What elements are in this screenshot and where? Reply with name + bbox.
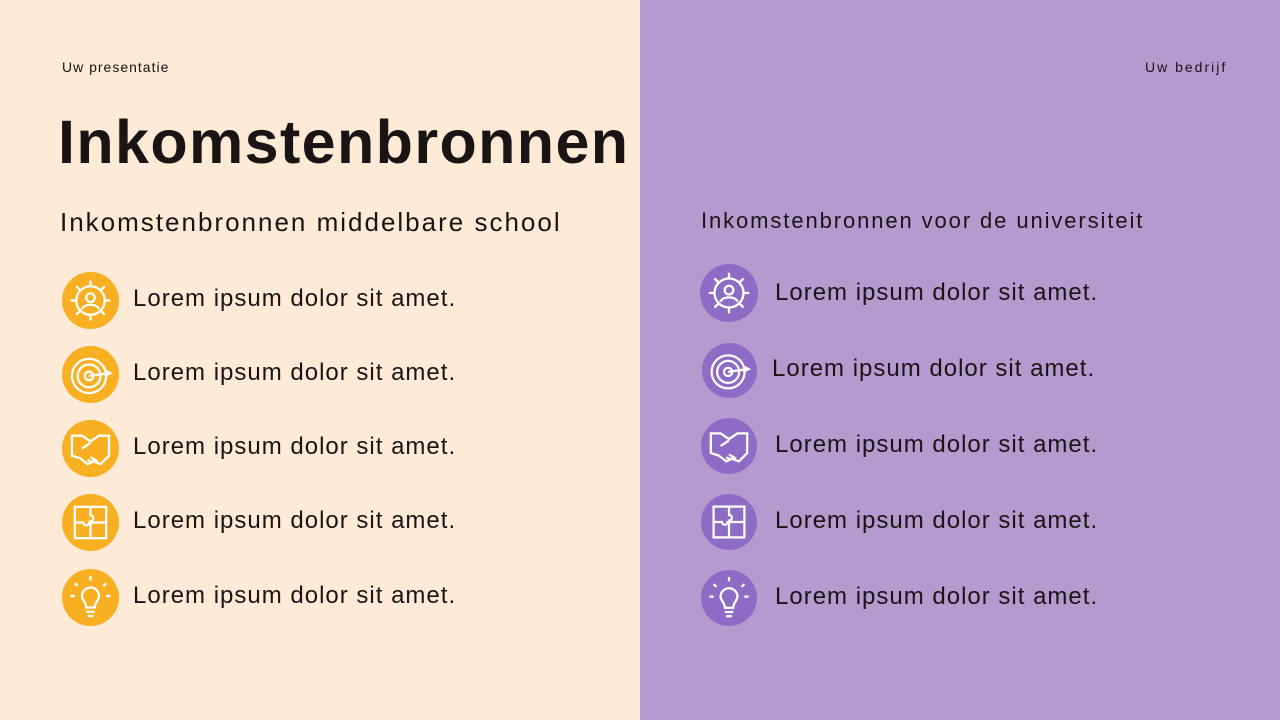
list: left	[62, 272, 456, 626]
icon: target	[702, 343, 757, 398]
title: Inkomstenbronnen	[58, 108, 629, 176]
text: Lorem ipsum dolor sit amet.	[772, 355, 1095, 382]
icon: target	[62, 346, 119, 403]
heading: right: Inkomstenbronnen voor de universiteit	[701, 208, 1144, 233]
icon: bulb	[701, 570, 757, 626]
header right: Uw bedrijf	[1145, 59, 1227, 75]
text: Lorem ipsum dolor sit amet.	[133, 582, 456, 609]
header left: Uw presentatie	[62, 59, 169, 75]
panel: left background	[0, 0, 640, 720]
text: Lorem ipsum dolor sit amet.	[133, 285, 456, 312]
icon: handshake	[62, 420, 119, 477]
icon: puzzle	[701, 494, 757, 550]
text: Lorem ipsum dolor sit amet.	[133, 433, 456, 460]
icon: bulb	[62, 569, 119, 626]
icon: gear	[62, 272, 119, 329]
text: Lorem ipsum dolor sit amet.	[775, 279, 1098, 306]
text: Lorem ipsum dolor sit amet.	[775, 431, 1098, 458]
text: Lorem ipsum dolor sit amet.	[133, 507, 456, 534]
icon: handshake	[701, 418, 757, 474]
text: Lorem ipsum dolor sit amet.	[775, 507, 1098, 534]
heading: left: Inkomstenbronnen middelbare school	[60, 207, 562, 237]
list: right	[700, 264, 1098, 626]
icon: gear	[700, 264, 758, 322]
text: Lorem ipsum dolor sit amet.	[133, 359, 456, 386]
text: Lorem ipsum dolor sit amet.	[775, 583, 1098, 610]
icon: puzzle	[62, 494, 119, 551]
panel: right background	[640, 0, 1280, 720]
